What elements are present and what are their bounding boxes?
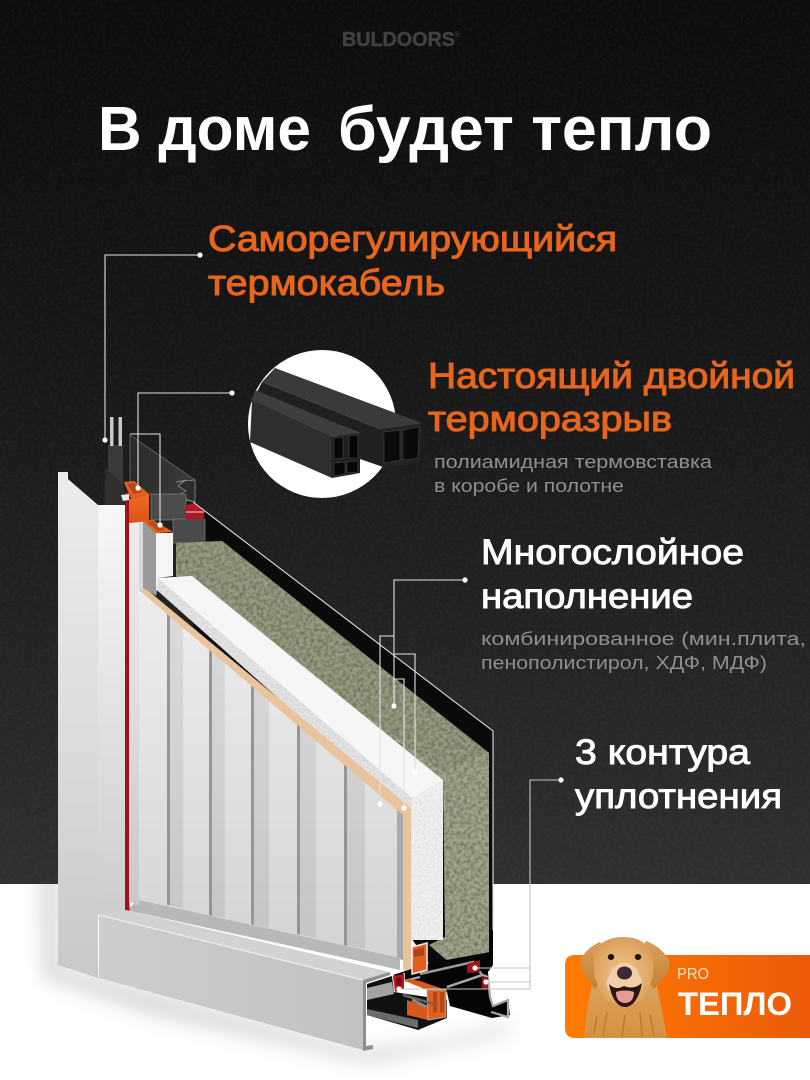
- mineral wool layer: [176, 541, 489, 963]
- PRO label: PRO: [677, 966, 709, 983]
- frame inner strip: [129, 521, 143, 905]
- heading: multilayer filling: Многослойное: [481, 533, 744, 572]
- heading: self-regulating cable: термокабель: [208, 262, 445, 303]
- ТЕПЛО label: ТЕПЛО: [678, 986, 792, 1022]
- line: filling: [380, 580, 465, 808]
- thermal insert round inset: [248, 350, 422, 498]
- upper profile: [257, 368, 422, 468]
- thermal cable: [105, 417, 124, 505]
- text: thermal break description: в коробе и полотне: [434, 475, 624, 496]
- callout lines: [105, 255, 561, 989]
- orange thermal breaks lower: [403, 943, 446, 1020]
- orange thermal break upper: [121, 481, 149, 523]
- icon: golden retriever: [580, 937, 670, 1038]
- line: thermal break: [130, 393, 232, 525]
- badge background: [565, 955, 810, 1038]
- title: [98, 95, 712, 164]
- heading: three seal contours: уплотнения: [575, 777, 782, 816]
- line: thermal cable: [105, 255, 200, 440]
- heading: self-regulating cable: Саморегулирующийся: [208, 218, 617, 259]
- lower profile: [250, 390, 360, 478]
- rear grey profile blocks: [130, 435, 205, 543]
- text: thermal break description: полиамидная термовставка: [434, 451, 713, 472]
- heading: three seal contours: [575, 733, 782, 816]
- black rear section: [176, 502, 493, 965]
- bottom profile section: [367, 930, 510, 1030]
- text: filling description: пенополистирол, ХДФ, МДФ): [481, 652, 767, 673]
- heading: multilayer filling: [481, 533, 744, 616]
- title: будет тепло: [338, 95, 712, 164]
- text: filling description: [481, 628, 806, 673]
- wood edge: [140, 584, 411, 972]
- title: В доме: [98, 95, 311, 164]
- heading: multilayer filling: наполнение: [481, 577, 693, 616]
- heading: three seal contours: 3 контура: [575, 733, 751, 772]
- white floor area: [0, 884, 810, 1080]
- brand logo: BULDOORS: [342, 29, 456, 51]
- badge: PRO ТЕПЛО: [565, 937, 810, 1038]
- red seal strip: [125, 492, 130, 912]
- mouth: [609, 983, 642, 1007]
- heading: double thermal break: терморазрыв: [428, 398, 672, 439]
- red seals: [393, 960, 488, 992]
- heading: double thermal break: [428, 355, 795, 439]
- door panel with grooves: [126, 586, 403, 970]
- door leaf edge profile: [143, 520, 173, 596]
- floor shadow: [40, 870, 520, 1064]
- line: diagonal wall edge: [193, 502, 493, 930]
- brand logo: ®: [455, 31, 461, 39]
- foam layer: [150, 576, 443, 940]
- lower sill trim: [99, 910, 390, 1051]
- eyes: [608, 954, 614, 960]
- heading: self-regulating cable: [208, 218, 617, 303]
- callout dots: [102, 252, 564, 992]
- tongue: [616, 990, 634, 1003]
- text: thermal break description: [434, 451, 713, 496]
- white circle: [248, 350, 396, 498]
- line: seals: [399, 780, 561, 989]
- text: filling description: комбинированное (мин.плита,: [481, 628, 806, 649]
- nose: [617, 966, 632, 980]
- door cross-section illustration: [40, 417, 520, 1064]
- heading: double thermal break: Настоящий двойной: [428, 355, 795, 396]
- outer white frame: [58, 472, 125, 978]
